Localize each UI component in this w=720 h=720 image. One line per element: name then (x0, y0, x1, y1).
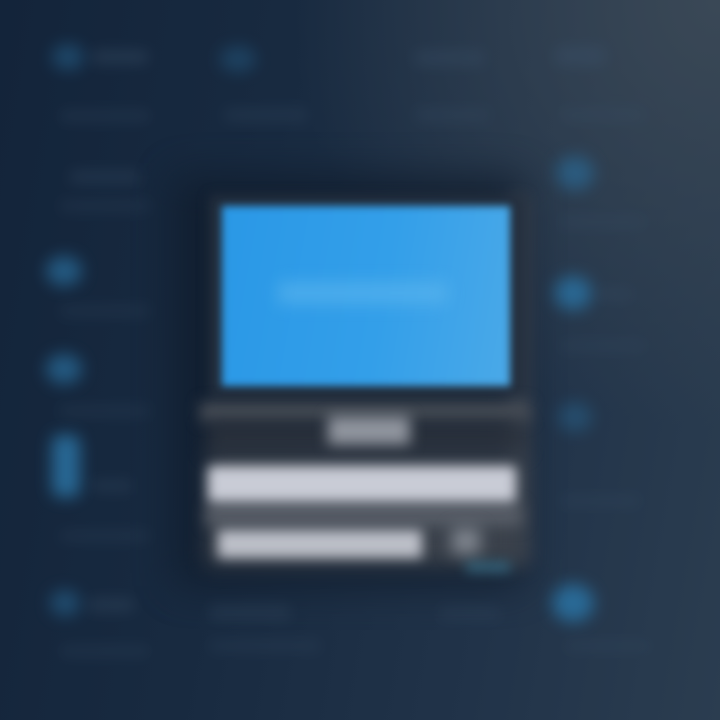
monitor shadow (174, 176, 524, 586)
monitor stand (328, 416, 410, 446)
monitor bezel (210, 196, 526, 396)
keyboard button (452, 528, 480, 554)
keyboard background (206, 454, 524, 566)
right side bezel glow (512, 194, 530, 564)
accent glow (466, 562, 510, 572)
neck shading (206, 420, 526, 454)
keyboard divider band (206, 504, 522, 526)
keyboard bottom bar (218, 530, 422, 558)
panel: left column of blurred items (39, 39, 144, 622)
keyboard top bar (208, 466, 516, 502)
panel: right column of blurred items (544, 52, 602, 630)
screen label (278, 282, 448, 304)
panel: top centre blurred items (218, 42, 258, 76)
monitor screen (222, 206, 510, 386)
monitor base bar (200, 402, 530, 422)
monitor illustration (174, 166, 536, 594)
panel: bottom centre blurred items (223, 612, 252, 614)
